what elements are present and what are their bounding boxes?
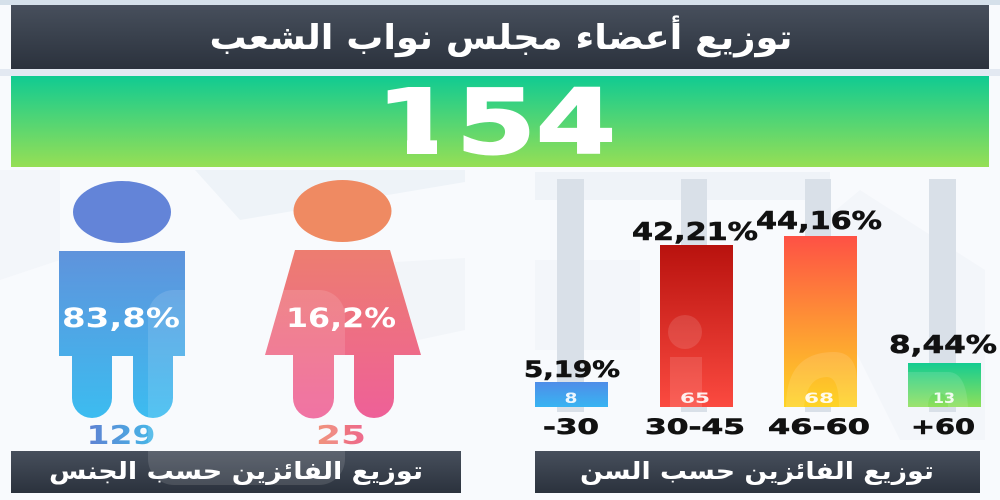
total banner [11,76,989,167]
title bar [11,5,989,69]
woman count: 25 [316,421,366,451]
bar: 30-45: 42,21% [632,217,758,246]
bar: 46-60 [756,206,882,439]
bar: over 60: 8,44% [889,330,997,359]
man count: 129 [86,421,156,451]
bar: over 60 [889,330,997,439]
age caption bar [535,451,980,493]
bar chart: age distribution [524,179,997,439]
icon: woman [265,180,421,418]
bar: under 30: 8 [564,391,578,407]
age caption text: توزيع الفائزين حسب السن [580,457,934,485]
watermark [148,290,968,485]
gender caption bar [11,451,461,493]
woman percentage: 16,2% [286,303,396,334]
bar: under 30 [524,358,620,439]
bar: under 30: -30 [543,415,599,439]
man percentage: 83,8% [62,303,180,334]
bar: 46-60: 68 [804,391,834,407]
total number: 154 [376,70,616,174]
title text: توزيع أعضاء مجلس نواب الشعب [210,15,792,58]
bar: over 60: 13 [933,391,955,407]
bar: under 30: 5,19% [524,358,620,383]
bar: 30-45: 30-45 [645,415,745,439]
bar: 46-60: 46-60 [768,415,870,439]
bar: 30-45: 65 [680,391,710,407]
gender caption text: توزيع الفائزين حسب الجنس [49,457,423,485]
bar tracks [557,179,956,412]
bar: 30-45 [632,217,758,439]
icon: man [59,181,185,418]
bar: 46-60: 44,16% [756,206,882,235]
bar: over 60: +60 [911,415,975,439]
